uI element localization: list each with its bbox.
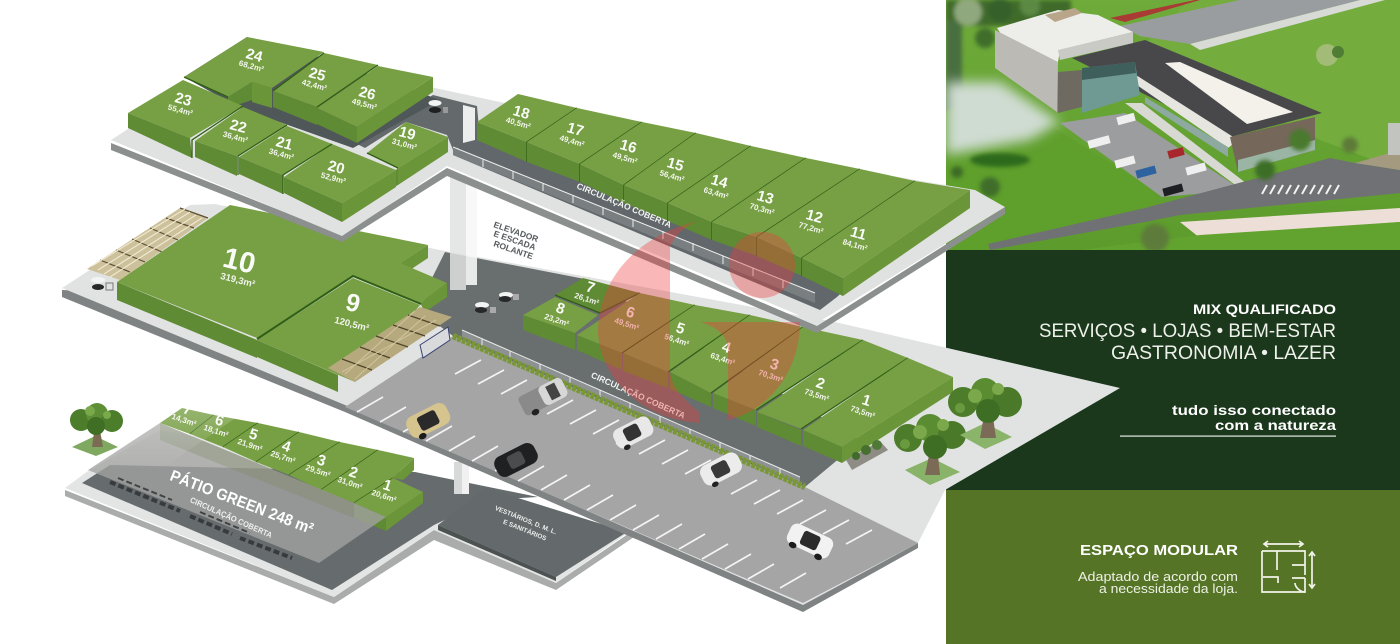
unit 25 bbox=[273, 53, 378, 125]
hedge bbox=[453, 336, 805, 487]
unit 20 bbox=[283, 144, 396, 222]
labels: ground floor units: 5 bbox=[247, 425, 260, 444]
unit 13: 70,3m² bbox=[749, 201, 776, 217]
unit 3 lower: 3 bbox=[768, 355, 781, 374]
car: white suv bbox=[783, 521, 835, 563]
pergola: right bbox=[328, 307, 452, 382]
unit 5 bbox=[223, 423, 299, 462]
car: yellow suv bbox=[403, 400, 454, 443]
floor: top level bbox=[111, 37, 1005, 333]
labels: ground floor units: 1 bbox=[381, 476, 394, 495]
unit 3 bbox=[289, 442, 378, 490]
unit 18 bbox=[477, 94, 577, 162]
unit 9: 9 bbox=[343, 288, 363, 319]
unit 13 bbox=[712, 158, 860, 256]
labels: ground floor units: 7 bbox=[181, 400, 194, 419]
dark walkway bbox=[453, 130, 850, 310]
unit 1 lower: 73,5m² bbox=[849, 404, 876, 420]
unit 8 bbox=[523, 297, 598, 350]
text: tagline: tudo isso conectado bbox=[1172, 402, 1336, 418]
icon: tree front bbox=[894, 414, 966, 485]
text: pátio green title: PÁTIO GREEN 248 m² bbox=[168, 466, 316, 538]
unit 20: 52,9m² bbox=[320, 171, 347, 186]
parking stripes bbox=[357, 360, 872, 588]
unit 9 bbox=[257, 276, 421, 392]
text: modular description: Adaptado de acordo com bbox=[1078, 569, 1238, 584]
car: white bbox=[611, 414, 657, 453]
unit 11: 84,1m² bbox=[842, 237, 869, 253]
railing bbox=[462, 330, 800, 484]
slab: top level bbox=[111, 37, 1005, 333]
text: tagline: com a natureza bbox=[1215, 417, 1336, 433]
unit 23: 23 bbox=[173, 89, 193, 110]
unit 14 bbox=[668, 146, 806, 240]
car: white 2 bbox=[697, 450, 746, 491]
labels: ground floor units: 14,3m² bbox=[171, 412, 198, 428]
unit 10: 319,3m² bbox=[219, 271, 256, 290]
unit 9: 120,5m² bbox=[333, 315, 370, 334]
top fade haze bbox=[88, 400, 240, 470]
unit 21: 36,4m² bbox=[268, 147, 295, 162]
unit 19 bbox=[367, 122, 448, 186]
unit 10 bbox=[117, 205, 447, 358]
unit 18: 40,5m² bbox=[505, 115, 532, 131]
overlay: pátio green bbox=[88, 423, 386, 563]
unit 14: 63,4m² bbox=[703, 185, 730, 201]
column top bbox=[463, 105, 475, 143]
column: ground floor bbox=[454, 462, 469, 494]
slab: pátio green bbox=[65, 430, 634, 604]
unit 11 bbox=[802, 181, 970, 296]
unit 13: 13 bbox=[755, 187, 776, 208]
unit 3 lower bbox=[713, 327, 863, 426]
unit 17 bbox=[527, 108, 642, 182]
text: elevador e escada rolante: E ESCADA bbox=[492, 228, 537, 252]
unit 2 bbox=[321, 450, 414, 503]
text: modular description bbox=[1078, 569, 1238, 596]
unit 22: 36,4m² bbox=[222, 130, 249, 145]
unit 7 lower: 26,1m² bbox=[573, 291, 600, 307]
icon: floor plan bbox=[1262, 541, 1315, 592]
labels: ground floor units bbox=[171, 398, 402, 504]
panel: aerial photo bbox=[946, 0, 1400, 252]
unit 15: 56,4m² bbox=[659, 168, 686, 184]
unit 6 lower: 49,5m² bbox=[613, 316, 640, 332]
unit 26: 49,5m² bbox=[351, 97, 378, 112]
unit 16: 16 bbox=[618, 136, 639, 157]
text: elevador e escada rolante: ROLANTE bbox=[492, 238, 535, 261]
unit 21 bbox=[238, 125, 332, 194]
unit 7 bbox=[160, 408, 214, 434]
icon: planter bbox=[846, 440, 888, 470]
unit 19: 19 bbox=[397, 123, 417, 144]
watermark logo bbox=[598, 221, 800, 423]
unit 26 bbox=[317, 66, 433, 143]
cars bbox=[403, 376, 835, 563]
unit 17: 17 bbox=[565, 119, 586, 140]
floor: dark circulation bbox=[425, 252, 860, 487]
unit 7 lower: 7 bbox=[584, 278, 597, 297]
icon: small tree bbox=[70, 403, 123, 456]
parking lot bbox=[345, 336, 918, 603]
unit 2 lower: 2 bbox=[814, 374, 827, 393]
car: black bbox=[491, 440, 541, 480]
labels: ground floor units: 18,1m² bbox=[203, 423, 230, 439]
unit 24: 24 bbox=[244, 45, 265, 66]
text: categories: GASTRONOMIA • LAZER bbox=[1111, 342, 1336, 364]
slab: vestiários bbox=[438, 488, 627, 581]
unit 16: 49,5m² bbox=[612, 150, 639, 166]
units: ground floor bbox=[160, 408, 423, 531]
panel: mix qualificado bbox=[946, 250, 1400, 490]
unit 6 bbox=[190, 415, 258, 447]
unit 6 lower: 6 bbox=[624, 303, 637, 322]
unit 1 lower: 1 bbox=[860, 391, 873, 410]
units: top right bbox=[477, 94, 970, 296]
unit 12 bbox=[757, 169, 915, 276]
unit 12: 77,2m² bbox=[798, 220, 825, 236]
pergola: left bbox=[87, 208, 208, 280]
unit 3 lower: 70,3m² bbox=[757, 368, 784, 384]
text: modular description: a necessidade da loja. bbox=[1099, 581, 1238, 596]
unit 17: 49,4m² bbox=[559, 133, 586, 149]
table icons bbox=[91, 277, 519, 313]
unit 5 lower: 56,4m² bbox=[663, 332, 690, 348]
units: second level bbox=[523, 276, 953, 463]
text: circulação coberta: CIRCULAÇÃO COBERTA bbox=[189, 496, 274, 540]
unit 24: 68,2m² bbox=[238, 59, 265, 74]
labels: ground floor units: 6 bbox=[213, 411, 226, 430]
text: circulação coberta upper: CIRCULAÇÃO COBERTA bbox=[575, 181, 673, 230]
unit 26: 26 bbox=[357, 83, 377, 104]
unit 1 lower bbox=[803, 358, 953, 463]
panel: espaço modular bbox=[946, 490, 1400, 644]
unit 22 bbox=[192, 106, 287, 176]
heading: mix qualificado: MIX QUALIFICADO bbox=[1193, 301, 1336, 317]
slab: second level bbox=[62, 204, 1120, 612]
labels: ground floor units: 25,7m² bbox=[270, 449, 297, 465]
unit 25: 25 bbox=[307, 64, 327, 85]
floor: térreo bbox=[65, 398, 634, 604]
unit 10: 10 bbox=[220, 242, 259, 281]
unit 4 lower: 63,4m² bbox=[709, 351, 736, 367]
labels: ground floor units: 21,9m² bbox=[237, 437, 264, 453]
bike racks bbox=[110, 478, 292, 558]
text: elevador e escada rolante: ELEVADOR bbox=[492, 219, 540, 244]
car: pickup bbox=[517, 376, 571, 419]
labels: ground floor units: 4 bbox=[280, 437, 294, 456]
floor: second level and parking bbox=[62, 175, 1120, 612]
labels: ground floor units: 3 bbox=[315, 451, 328, 470]
unit 25: 42,4m² bbox=[301, 78, 328, 93]
labels: ground floor units: 31,0m² bbox=[337, 475, 364, 491]
units: top left bbox=[128, 37, 448, 222]
text: circulação coberta lower: CIRCULAÇÃO COBERTA bbox=[590, 370, 687, 421]
unit 12: 12 bbox=[804, 206, 825, 227]
unit 8: 23,2m² bbox=[543, 312, 570, 328]
unit 14: 14 bbox=[709, 171, 730, 192]
text: elevador e escada rolante bbox=[492, 219, 540, 261]
labels: ground floor units: 29,5m² bbox=[305, 463, 332, 479]
unit 5 lower bbox=[623, 305, 750, 388]
unit 19: 31,0m² bbox=[391, 137, 418, 152]
unit 20: 20 bbox=[326, 157, 346, 178]
table icon bbox=[428, 100, 448, 113]
unit 2 lower bbox=[757, 340, 908, 446]
unit 5 lower: 5 bbox=[674, 319, 687, 338]
unit 23 bbox=[128, 80, 243, 158]
column: elevator bbox=[450, 175, 477, 290]
text: categories bbox=[1039, 320, 1336, 364]
unit 4 lower bbox=[670, 315, 803, 407]
heading: espaço modular: ESPAÇO MODULAR bbox=[1080, 543, 1239, 559]
text: tagline bbox=[1172, 402, 1336, 433]
labels: ground floor units: 2 bbox=[347, 463, 360, 482]
unit 23: 55,4m² bbox=[167, 103, 194, 118]
unit 1 bbox=[354, 478, 423, 531]
unit 6 lower bbox=[577, 293, 695, 370]
unit 22: 22 bbox=[228, 116, 248, 137]
icon: tree back bbox=[948, 378, 1022, 449]
text: vestiários: VESTIÁRIOS, D. M. L. bbox=[494, 503, 558, 536]
railing bbox=[453, 147, 815, 303]
unit 4 bbox=[256, 432, 340, 475]
labels: ground floor units: 20,6m² bbox=[371, 488, 398, 504]
unit 2 lower: 73,5m² bbox=[803, 387, 830, 403]
unit 24 bbox=[184, 37, 324, 108]
unit 15: 15 bbox=[665, 154, 686, 175]
unit 15 bbox=[624, 133, 751, 221]
unit 21: 21 bbox=[274, 133, 294, 154]
text: vestiários: E SANITÁRIOS bbox=[502, 517, 549, 543]
unit 7 lower bbox=[555, 276, 640, 313]
text: categories: SERVIÇOS • LOJAS • BEM-ESTAR bbox=[1039, 320, 1336, 342]
unit 8: 8 bbox=[554, 299, 567, 318]
unit 16 bbox=[580, 122, 696, 203]
unit 11: 11 bbox=[848, 223, 868, 244]
unit 18: 18 bbox=[511, 102, 532, 123]
unit 4 lower: 4 bbox=[720, 338, 734, 357]
